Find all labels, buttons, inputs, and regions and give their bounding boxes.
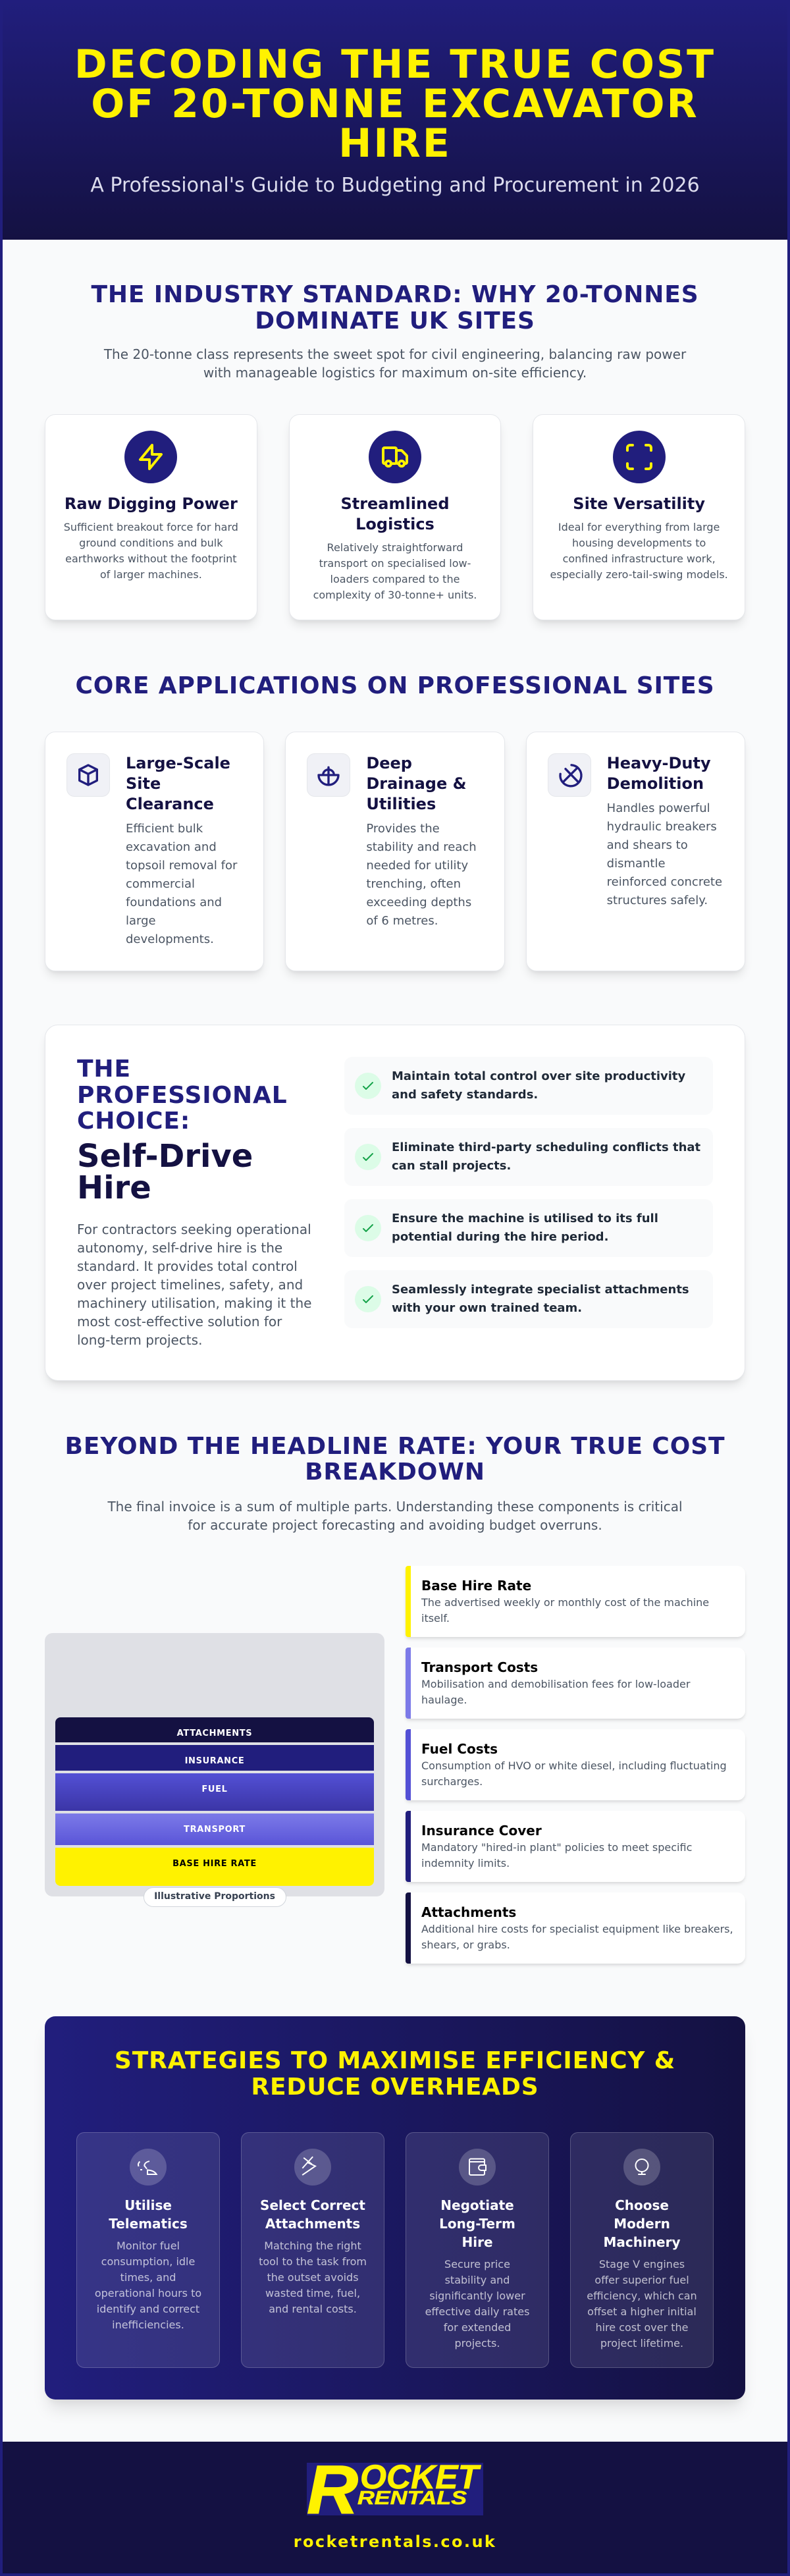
card text: Monitor fuel <box>117 2240 180 2252</box>
title: HIRE <box>338 121 452 167</box>
logo: Rocket Rentals <box>307 2452 483 2529</box>
card title: Modern <box>614 2216 670 2232</box>
subtitle: A Professional's Guide to Budgeting and Procurement in 2026 <box>90 174 700 197</box>
item text: Seamlessly integrate specialist attachments <box>392 1283 689 1297</box>
card: site versatility <box>533 414 745 620</box>
card text: tool to the task from <box>259 2255 367 2268</box>
card content: Drainage & <box>366 774 467 793</box>
heading: industry standard <box>91 281 699 335</box>
logo: Rocket Rentals: R <box>307 2452 358 2529</box>
card text: Matching the right <box>264 2240 361 2252</box>
bar: insurance: INSURANCE <box>185 1756 244 1766</box>
legend: insurance cover <box>406 1811 745 1882</box>
bar: transport: TRANSPORT <box>184 1825 246 1835</box>
title: DECODING THE TRUE COST <box>74 41 716 88</box>
card text: times, and <box>120 2271 176 2284</box>
paragraph: self-drive explanation: For contractors seeking operational <box>77 1221 311 1237</box>
card text: transport on specialised low- <box>319 557 471 570</box>
icon: truck <box>369 431 421 483</box>
strategy card: modern machinery <box>570 2132 714 2368</box>
intro text: industry standard: The 20-tonne class represents the sweet spot for civil engineering, balancing raw power <box>104 346 686 362</box>
card text: efficiency, which can <box>587 2290 697 2302</box>
card content: Large-Scale <box>126 753 230 772</box>
item text: with your own trained team. <box>392 1301 582 1315</box>
heading: strategies <box>115 2047 675 2101</box>
card text: complexity of 30-tonne+ units. <box>313 589 477 601</box>
card text <box>64 521 238 581</box>
card text <box>313 541 477 601</box>
card text <box>587 2258 697 2349</box>
card title: Raw Digging Power <box>65 494 238 512</box>
card: streamlined logistics <box>289 414 501 620</box>
item text: and safety standards. <box>392 1088 538 1102</box>
heading: industry standard: DOMINATE UK SITES <box>255 308 535 335</box>
legend text <box>421 1759 727 1788</box>
card text: Relatively straightforward <box>327 541 463 554</box>
bar: base hire rate <box>55 1848 374 1886</box>
card text: consumption, idle <box>101 2255 195 2268</box>
paragraph: self-drive explanation: standard. It provides total control <box>77 1258 298 1274</box>
card text <box>95 2240 201 2331</box>
item text <box>392 1283 689 1315</box>
card content: developments. <box>126 932 214 946</box>
card content: Deep <box>366 753 412 772</box>
bar: attachments: ATTACHMENTS <box>177 1729 252 1738</box>
card content: structures safely. <box>607 894 708 907</box>
card content: foundations and <box>126 896 222 909</box>
legend: transport costs <box>406 1648 745 1719</box>
card content: Efficient bulk <box>126 822 203 836</box>
card title: Machinery <box>603 2234 681 2250</box>
card text: inefficiencies. <box>112 2319 184 2331</box>
card text: Ideal for everything from large <box>558 521 720 533</box>
card title: Negotiate <box>440 2197 514 2213</box>
paragraph: self-drive explanation: autonomy, self-drive hire is the <box>77 1240 282 1256</box>
heading: the professional choice <box>77 1056 288 1135</box>
card title <box>603 2197 681 2250</box>
card text: of larger machines. <box>100 568 202 581</box>
card text: hire cost over the <box>595 2321 689 2334</box>
bar: fuel: FUEL <box>201 1784 228 1794</box>
legend text: haulage. <box>421 1694 467 1706</box>
icon: check <box>355 1215 381 1241</box>
card text: Secure price <box>444 2258 510 2270</box>
legend title: Base Hire Rate <box>421 1578 531 1594</box>
card content: commercial <box>126 877 195 891</box>
item text <box>392 1212 658 1244</box>
card title: Long-Term <box>439 2216 515 2232</box>
item text <box>392 1140 700 1173</box>
card text: ground conditions and bulk <box>79 537 223 549</box>
card text: and rental costs. <box>269 2303 357 2315</box>
legend text <box>421 1596 709 1624</box>
icon: drainage bowl <box>307 753 350 797</box>
item text: Maintain total control over site productivity <box>392 1069 685 1083</box>
legend text: surcharges. <box>421 1775 483 1788</box>
card text: Sufficient breakout force for hard <box>64 521 238 533</box>
card text: confined infrastructure work, <box>563 552 716 565</box>
card text: effective daily rates <box>425 2305 529 2318</box>
legend: fuel costs <box>406 1729 745 1800</box>
icon: tool zigzag <box>294 2149 331 2186</box>
icon: cube <box>66 753 110 797</box>
legend text: Additional hire costs for specialist equipment like breakers, <box>421 1923 733 1935</box>
heading: true cost breakdown: BEYOND THE HEADLINE RATE: YOUR TRUE COST <box>65 1433 725 1459</box>
strategy card: telematics <box>76 2132 220 2368</box>
card content: stability and reach <box>366 840 477 854</box>
title <box>74 41 716 167</box>
card text: for extended <box>444 2321 511 2334</box>
card text: the outset avoids <box>267 2271 359 2284</box>
title: OF 20-TONNE EXCAVATOR <box>91 81 699 127</box>
icon: lightning bolt <box>124 431 177 483</box>
card content: Site <box>126 774 161 793</box>
card title: Logistics <box>356 515 434 533</box>
card text: offset a higher initial <box>587 2305 697 2318</box>
card text: stability and <box>445 2274 510 2286</box>
card content: Heavy-Duty <box>607 753 711 772</box>
strategy card: long-term hire <box>406 2132 549 2368</box>
legend text: shears, or grabs. <box>421 1939 510 1951</box>
chart note pill <box>144 1887 286 1907</box>
bar: transport <box>55 1813 374 1845</box>
heading: industry standard: THE INDUSTRY STANDARD: WHY 20-TONNES <box>91 281 699 308</box>
card content: Provides the <box>366 822 440 836</box>
card text: Stage V engines <box>599 2258 685 2270</box>
item text: Ensure the machine is utilised to its full <box>392 1212 658 1225</box>
card content: trenching, often <box>366 877 461 891</box>
website url: rocketrentals.co.uk <box>294 2533 496 2551</box>
card text <box>425 2258 529 2349</box>
card content: reinforced concrete <box>607 875 722 889</box>
card text: operational hours to <box>95 2287 201 2299</box>
legend text: Mandatory "hired-in plant" policies to meet specific <box>421 1841 692 1854</box>
list item: attachments <box>344 1270 713 1328</box>
legend text <box>421 1923 733 1951</box>
card title <box>109 2197 188 2232</box>
item text: can stall projects. <box>392 1159 511 1173</box>
card content <box>366 753 477 928</box>
list item: scheduling conflicts <box>344 1128 713 1186</box>
panel: self-drive hire <box>45 1025 745 1381</box>
heading: the professional choice: PROFESSIONAL <box>77 1082 288 1109</box>
stacked cost chart <box>45 1633 384 1896</box>
logo: Rocket Rentals: RENTALS <box>357 2488 467 2509</box>
card content: needed for utility <box>366 859 468 872</box>
legend text: Mobilisation and demobilisation fees for low-loader <box>421 1678 690 1690</box>
card text <box>259 2240 367 2315</box>
legend text: Consumption of HVO or white diesel, including fluctuating <box>421 1759 727 1772</box>
card title <box>340 494 450 533</box>
bar: insurance <box>55 1745 374 1771</box>
icon: corner brackets <box>613 431 666 483</box>
icon: globe stand <box>623 2149 660 2186</box>
item text: potential during the hire period. <box>392 1230 608 1244</box>
icon: wallet <box>459 2149 496 2186</box>
heading: the professional choice: THE <box>77 1056 131 1083</box>
card: heavy-duty demolition <box>526 731 745 971</box>
paragraph: self-drive explanation: machinery utilisation, making it the <box>77 1295 311 1311</box>
heading: strategies: REDUCE OVERHEADS <box>251 2074 539 2101</box>
card content: large <box>126 914 156 928</box>
bar: base hire rate: BASE HIRE RATE <box>172 1859 257 1869</box>
heading: self-drive hire: Self-Drive <box>77 1138 253 1175</box>
intro text: true cost breakdown: for accurate project forecasting and avoiding budget overruns. <box>188 1517 602 1533</box>
logo: Rocket Rentals: OCKET <box>360 2458 481 2496</box>
intro text: industry standard <box>104 346 686 381</box>
card text: projects. <box>455 2337 500 2349</box>
heading: true cost breakdown <box>65 1433 725 1486</box>
legend: base hire rate <box>406 1566 745 1637</box>
heading: self-drive hire: Hire <box>77 1169 151 1206</box>
card text: especially zero-tail-swing models. <box>550 568 728 581</box>
card content: Demolition <box>607 774 704 793</box>
card text: offer superior fuel <box>594 2274 689 2286</box>
card: large-scale site clearance <box>45 731 264 971</box>
card title: Choose <box>615 2197 669 2213</box>
bar: fuel <box>55 1773 374 1811</box>
card title <box>260 2197 365 2232</box>
card content: Clearance <box>126 795 214 813</box>
card text: significantly lower <box>429 2290 525 2302</box>
intro text: true cost breakdown: The final invoice is a sum of multiple parts. Understanding these components is critical <box>107 1499 683 1515</box>
legend title: Attachments <box>421 1904 516 1920</box>
card text: wasted time, fuel, <box>265 2287 360 2299</box>
paragraph: self-drive explanation: long-term projects. <box>77 1332 202 1348</box>
panel: strategies <box>45 2016 745 2400</box>
item text <box>392 1069 685 1102</box>
card content: exceeding depths <box>366 896 471 909</box>
card content: hydraulic breakers <box>607 820 717 834</box>
card: deep drainage and utilities <box>285 731 505 971</box>
card title: Select Correct <box>260 2197 365 2213</box>
legend: attachments <box>406 1892 745 1964</box>
card title: Hire <box>461 2234 493 2250</box>
legend text <box>421 1678 690 1706</box>
intro text: true cost breakdown <box>107 1499 683 1533</box>
legend title: Transport Costs <box>421 1659 538 1675</box>
paragraph: self-drive explanation <box>77 1221 311 1348</box>
card title <box>439 2197 515 2250</box>
card text: project lifetime. <box>600 2337 683 2349</box>
legend title: Fuel Costs <box>421 1741 498 1757</box>
strategy card: attachments <box>241 2132 384 2368</box>
icon: demolition circle <box>548 753 591 797</box>
card content: of 6 metres. <box>366 914 438 928</box>
icon: check <box>355 1144 381 1170</box>
card text: housing developments to <box>572 537 706 549</box>
card content: dismantle <box>607 857 666 871</box>
icon: check <box>355 1286 381 1312</box>
footer <box>3 2442 787 2573</box>
card title: Streamlined <box>340 494 450 512</box>
list item: total control <box>344 1057 713 1115</box>
heading: core applications: CORE APPLICATIONS ON PROFESSIONAL SITES <box>75 672 715 699</box>
header banner <box>3 0 787 240</box>
card content <box>126 753 237 946</box>
icon: telematics gauge <box>130 2149 167 2186</box>
icon: check <box>355 1073 381 1099</box>
card text: identify and correct <box>97 2303 199 2315</box>
card title: Attachments <box>265 2216 360 2232</box>
intro text: industry standard: with manageable logistics for maximum on-site efficiency. <box>203 365 587 381</box>
card content: Handles powerful <box>607 801 710 815</box>
card text: loaders compared to the <box>330 573 460 585</box>
heading: the professional choice: CHOICE: <box>77 1108 190 1135</box>
chart note pill: Illustrative Proportions <box>154 1891 275 1902</box>
paragraph: self-drive explanation: most cost-effective solution for <box>77 1314 282 1329</box>
item text: Eliminate third-party scheduling conflicts that <box>392 1140 700 1154</box>
card text <box>550 521 728 581</box>
legend title: Insurance Cover <box>421 1823 542 1838</box>
card content: excavation and <box>126 840 217 854</box>
card content: and shears to <box>607 838 688 852</box>
card: raw digging power <box>45 414 257 620</box>
card content: Utilities <box>366 795 436 813</box>
card title: Utilise <box>124 2197 172 2213</box>
list item: machine utilisation <box>344 1199 713 1257</box>
bar: attachments <box>55 1717 374 1742</box>
heading: self-drive hire <box>77 1138 253 1206</box>
paragraph: self-drive explanation: over project timelines, safety, and <box>77 1277 303 1293</box>
card content: topsoil removal for <box>126 859 237 872</box>
card text: earthworks without the footprint <box>65 552 237 565</box>
card title: Site Versatility <box>573 494 705 512</box>
card content <box>607 753 722 907</box>
legend text: itself. <box>421 1612 450 1624</box>
card title: Telematics <box>109 2216 188 2232</box>
legend text: indemnity limits. <box>421 1857 510 1869</box>
legend text <box>421 1841 692 1869</box>
heading: true cost breakdown: BREAKDOWN <box>305 1459 485 1486</box>
legend text: The advertised weekly or monthly cost of the machine <box>421 1596 709 1609</box>
heading: strategies: STRATEGIES TO MAXIMISE EFFICIENCY & <box>115 2047 675 2074</box>
